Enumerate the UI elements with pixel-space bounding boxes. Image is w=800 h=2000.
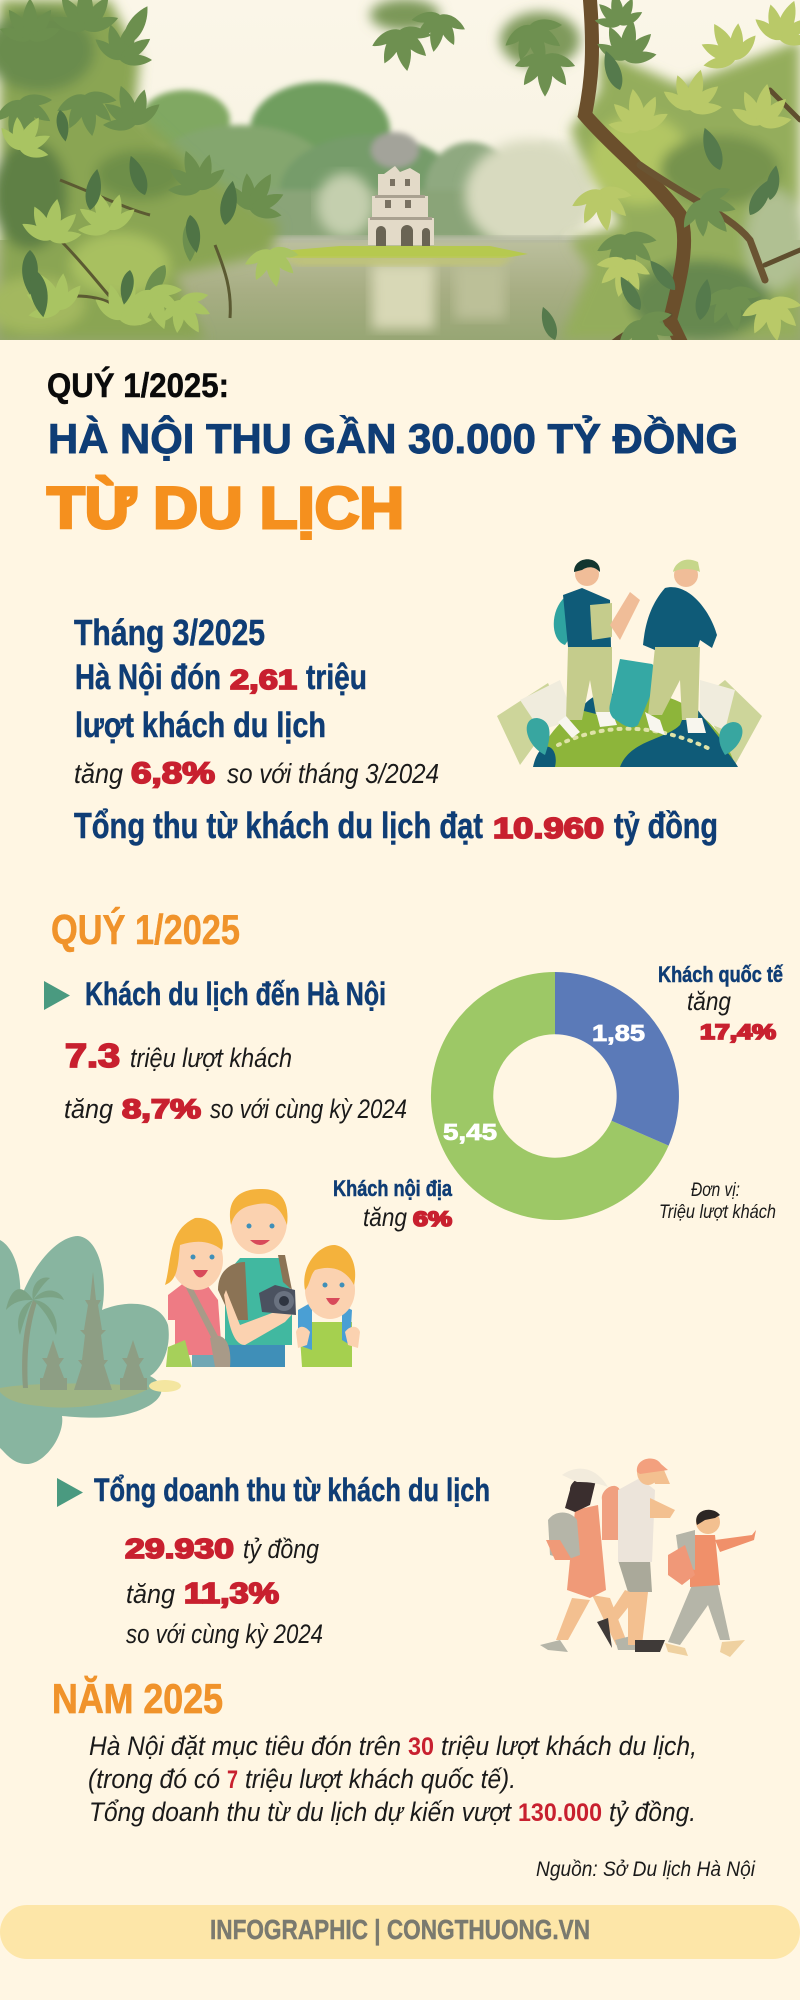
unit note [659,1180,776,1223]
footer band [0,1905,800,1959]
line 3: 130.000 [518,1799,602,1827]
right leaves [368,0,800,372]
Turtle Tower [368,166,434,246]
international slice [555,972,679,1146]
main title line: HÀ NỘI THU GẦN 30.000 TỶ ĐỒNG [48,414,738,462]
visitors line: Hà Nội đón [75,658,221,697]
triangle marker [57,1478,83,1507]
left branches and leaves [0,0,305,347]
text block: 2025 targets [88,1731,697,1827]
line 1: triệu lượt khách du lịch, [441,1731,697,1761]
callout: international visitors: tăng [687,986,731,1016]
left pagoda [40,1340,67,1390]
revenue value: 29.930 [125,1533,234,1564]
landmarks behind globe [497,680,762,765]
man [597,1458,675,1652]
illustration: family of tourists [165,1189,360,1367]
unit note: Đơn vị: [691,1180,740,1201]
line 1 [89,1731,697,1761]
comparison: so với cùng kỳ 2024 [126,1619,323,1649]
right pagoda [120,1340,147,1390]
growth line [74,757,439,790]
right tree trunk [585,0,800,345]
donut chart [431,972,679,1220]
total revenue line: 10.960 [493,813,604,845]
revenue value [125,1533,319,1564]
callout: domestic visitors: Khách nội địa [333,1176,453,1201]
total visitors: 7.3 [65,1037,120,1074]
title kicker: QUÝ 1/2025: [47,367,229,405]
line 2: (trong đó có [88,1764,220,1794]
illustration: walking family with backpacks [540,1458,756,1657]
ground [0,1384,150,1408]
value 1,85: 1,85 [592,1020,645,1046]
woman [540,1469,635,1652]
palm tree [6,1277,64,1388]
line 1: 30 [408,1733,434,1761]
total revenue line: tỷ đồng [614,805,718,846]
revenue value: tỷ đồng [243,1534,319,1564]
callout: domestic visitors [333,1176,453,1232]
globe [533,694,738,767]
subsection: visitors to Hanoi [44,976,407,1124]
hero photo: Hoan Kiem lake and Turtle Tower [0,0,800,372]
callout: international visitors [658,962,784,1044]
subsection heading: Khách du lịch đến Hà Nội [85,976,386,1012]
suitcase [609,659,657,727]
callout: international visitors: 17,4% [700,1021,776,1044]
callout: domestic visitors: 6% [413,1208,452,1231]
total revenue line: Tổng thu từ khách du lịch đạt [74,805,483,846]
visitors growth: tăng [64,1094,113,1124]
revenue growth: 11,3% [184,1578,279,1610]
revenue growth [126,1578,279,1610]
mother [165,1218,230,1367]
growth line: 6,8% [131,757,215,790]
section heading: Q1 2025: QUÝ 1/2025 [51,906,240,953]
woman [643,560,717,735]
footer band: INFOGRAPHIC | CONGTHUONG.VN [210,1914,590,1945]
triangle marker [44,981,70,1010]
tower reflection [372,264,434,329]
growth line: so với tháng 3/2024 [227,758,439,789]
visitors line: triệu [306,658,367,697]
source note: Nguồn: Sở Du lịch Hà Nội [536,1858,756,1881]
text block: March 2025 [74,612,718,846]
island [268,246,528,258]
father [218,1189,296,1367]
visitors line: 2,61 [230,664,297,695]
line 1: Hà Nội đặt mục tiêu đón trên [89,1731,401,1761]
subsection heading: Tổng doanh thu từ khách du lịch [94,1472,490,1508]
title [47,367,738,541]
month heading: Tháng 3/2025 [74,612,265,653]
visitors line [75,658,367,697]
line 2: triệu lượt khách quốc tế). [245,1764,516,1794]
distant buildings [561,142,574,150]
left foliage mass [0,0,280,340]
revenue growth: tăng [126,1579,175,1609]
blob [0,1236,169,1464]
growth line: tăng [74,758,123,789]
right foliage mass [370,0,800,340]
visitors growth: 8,7% [122,1094,201,1124]
child [296,1245,360,1367]
line 2 [88,1764,516,1794]
mist [465,140,595,250]
yellow ground shadow [149,1380,181,1392]
distant trees [141,78,500,240]
boy [665,1510,756,1657]
visitors growth: so với cùng kỳ 2024 [210,1094,407,1124]
domestic slice [431,972,669,1220]
man [554,559,640,738]
lake [0,240,800,340]
map pins [527,718,742,755]
central pagoda [74,1272,112,1390]
section heading: year 2025: NĂM 2025 [52,1675,223,1722]
value 5,45: 5,45 [443,1119,497,1145]
illustration: green blob with pagodas [0,1236,181,1464]
line 2: 7 [227,1766,238,1794]
illustration: couple of travellers on a globe [497,559,762,767]
total visitors: triệu lượt khách [130,1043,292,1073]
line 3: tỷ đồng. [609,1797,696,1827]
total visitors [65,1037,292,1074]
unit note: Triệu lượt khách [659,1202,776,1223]
visitors growth [64,1094,407,1124]
callout: domestic visitors: tăng [363,1202,407,1232]
visitors line 2: lượt khách du lịch [75,706,326,745]
line 3: Tổng doanh thu từ du lịch dự kiến vượt [89,1797,512,1827]
orange title line: TỪ DU LỊCH [47,476,404,541]
subsection: total revenue [57,1472,490,1649]
